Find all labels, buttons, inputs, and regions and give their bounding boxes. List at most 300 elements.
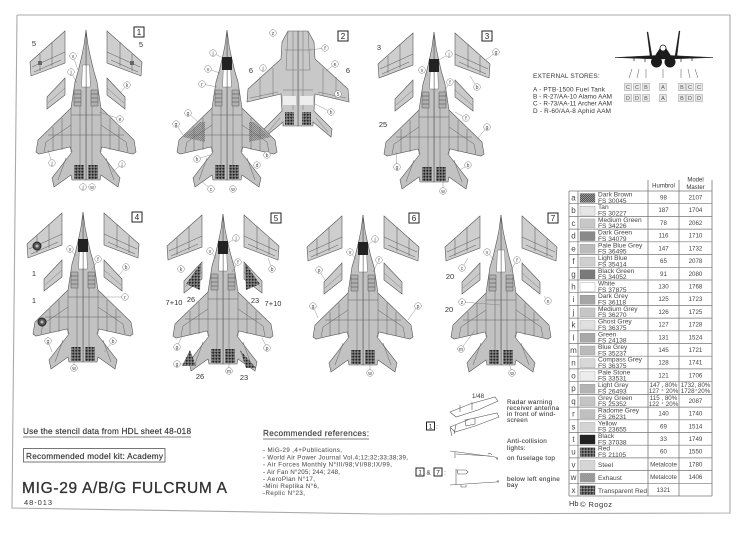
row q: Grey Green [598,395,633,402]
row h: White [598,280,615,288]
table header: Humbrol [652,184,675,190]
row b: 1704 [689,207,703,214]
callouts: view 3: v [421,68,424,74]
callouts: view 7: c [461,266,464,272]
badge: view 1 detail [426,422,438,430]
row x [572,486,671,495]
row x: 1321 [657,487,671,494]
row b: 187 [658,207,669,214]
row v: Steel [598,462,614,469]
row j: 126 [658,309,669,316]
callouts: view 1: j [50,161,53,167]
external stores heading: EXTERNAL STORES: [533,73,600,80]
callouts: view 7: z [461,300,464,306]
callouts: view 2: h [196,157,199,163]
row q: 122 ⁺ 20% [649,401,679,408]
badge: view 1 and 7 detail: : [444,470,446,476]
callouts: view 6 [310,236,421,377]
callouts: view 3: b [467,163,470,169]
note: engine bay: below left engine [507,476,560,483]
row j: Medium Grey [598,306,638,313]
row q: FS 25352 [598,401,627,408]
callouts: view 5: j [234,236,237,242]
callouts: view 5: m [227,369,231,375]
stores loadout boxes: C [697,85,701,91]
note: radar: screen [507,417,528,424]
row u: Red [598,446,610,453]
callouts: view 6: j [373,237,376,243]
callouts: view 6: g [312,304,315,310]
callouts: view 5: f [237,260,239,266]
row r: r [572,410,575,419]
references list: -Replic N°23, [263,490,305,497]
badge 2: 2 [341,32,346,41]
callouts: view 7 [458,249,551,377]
row e: Pale Blue Grey [598,242,643,249]
callouts: view 4: w [72,366,76,372]
title: MIG-29 A/B/G FULCRUM A [22,480,228,497]
row e [571,242,703,256]
row t: Black [598,433,615,440]
external stores list [533,86,612,115]
row a: a [571,194,576,202]
row g: 2080 [689,271,703,278]
callouts: view 1: j [69,70,72,76]
row n: n [571,359,576,368]
recommended kit box [24,448,165,462]
aircraft view 7: 20 [445,305,453,314]
callouts: view 7: v [486,250,489,256]
row l: 131 [658,334,669,341]
callouts: view 2: c [210,187,213,193]
external stores list: A - PTB-1500 Fuel Tank [533,86,606,94]
references list: -Mini Replika N°6, [263,483,319,490]
callouts: view 6: p [318,268,321,274]
callouts: view 5: g [176,345,179,351]
row n: 128 [658,360,669,367]
row c: 2062 [689,220,703,227]
row s: s [572,422,576,431]
row w: Metalcote [650,474,677,481]
row p: p [571,384,576,393]
callouts: view 7: w [510,371,514,377]
scale label: 1/48 [472,393,485,400]
row p: 147 , 80% [650,382,678,389]
row g: Black Green [598,268,635,275]
row w: Exhaust [598,475,622,482]
row d: Dark Green [598,230,632,237]
row o: o [571,371,576,380]
aircraft view 6 [307,213,421,377]
callouts: view 2: j [211,51,214,57]
row m: FS 35237 [598,350,627,357]
stencil note: Use the stencil data from HDL sheet 48-018 [23,427,191,436]
row m [570,344,703,357]
row p: FS 26493 [598,389,627,396]
row j [572,306,703,319]
callouts: view 2: b [266,153,269,159]
callouts: view 5: b [271,267,274,273]
callouts: view 2: f [324,46,326,52]
row e: 147 [658,245,669,252]
row f: f [572,257,575,266]
references list [263,447,408,497]
references list: - MiG-29 ,4+Publications, [263,447,342,454]
row d: 1710 [689,233,703,240]
callouts: view 6: w [368,371,372,377]
callouts: view 1: v [72,54,75,60]
row h: 130 [658,284,669,290]
badge 1 [134,27,144,37]
stores loadout boxes: D [688,96,692,102]
callouts: view 3: g [396,165,399,171]
callouts: view 1: e [119,117,122,123]
callouts: view 6: p [417,304,420,310]
row c: 78 [660,220,667,227]
row m: Blue Grey [598,344,628,351]
badge: view 1 and 7 detail: 7 [436,470,440,476]
row s: FS 23655 [598,427,627,434]
callouts: view 2: w [231,187,235,193]
row o: Pale Stone [598,369,631,376]
detail diagram: engine bay light [450,469,499,487]
row m: 145 [658,347,669,354]
row f: 2078 [689,258,703,265]
row g [571,268,703,281]
badge 5 [271,213,281,223]
row m: 1721 [689,347,703,354]
row u: 60 [660,449,667,456]
references list: - World Air Power Journal Vol.4;12;32;33;38;39, [263,454,408,462]
callouts: view 6: f [378,258,380,264]
callouts: view 3: w [441,189,445,195]
row f [572,255,703,268]
references list: - AeroPlan N°17, [263,476,315,483]
callouts: view 7: n [547,299,550,305]
row q: q [571,397,576,406]
badge 2 [338,31,348,41]
copyright note: Hb [569,499,579,508]
row w: 1406 [689,474,703,481]
badge 5: 5 [274,214,279,223]
row d: FS 34079 [598,236,627,243]
row c: Medium Green [598,217,642,224]
row t: 1749 [689,436,703,443]
row a: 98 [660,194,667,202]
aircraft view 2: 6 [249,66,253,75]
row p [571,382,711,396]
recommended references heading: Recommended references: [263,429,369,438]
callouts: view 7: m [459,347,463,353]
aircraft view 5: 26 [187,295,195,304]
note: anti-collision [507,438,555,462]
detail diagram: radar antenna [450,397,499,436]
row n: FS 36375 [598,363,627,370]
stores loadout boxes: B [680,96,684,102]
stores loadout boxes: C [635,85,639,91]
row o [571,369,703,383]
badge: view 1 and 7 detail [416,468,446,476]
aircraft view 2 [173,30,350,193]
row o: 1706 [689,372,703,379]
callouts: view 2: v [207,67,210,73]
aircraft view 5: 7+10 [265,299,281,308]
row r: Radome Grey [598,408,640,415]
aircraft view 1: 5 [139,40,143,49]
aircraft view 4: 1 [32,269,36,278]
badge 3 [482,31,492,41]
stores loadout boxes: D [697,96,701,102]
row r: 140 [658,411,669,418]
copyright note: © Rogoz [580,500,612,509]
aircraft view 5 [166,213,281,382]
badge 4 [132,212,142,222]
aircraft view 3: 25 [379,120,387,129]
callouts: view 2: g [187,111,190,117]
row t [572,433,703,446]
row h [571,280,703,294]
row n [571,357,703,370]
stores loadout boxes: A [661,96,665,102]
callouts: view 4: r [124,295,126,301]
row p: 127 ⁺ 20% [649,388,679,395]
row b: b [571,206,576,215]
callouts: view 2: z [272,31,275,37]
badge: view 1 detail: 1 [429,424,433,430]
aircraft view 7 [445,213,558,377]
callouts: view 4: b [112,339,115,345]
row g: FS 34052 [598,274,627,281]
row q: 2087 [689,398,703,405]
aircraft view 1: 5 [32,39,36,48]
references list: - Air Fan N°205; 244; 248, [263,469,340,476]
pylon ticks [629,69,698,78]
row j: FS 36270 [598,312,627,319]
aircraft view 5: 23 [240,373,248,382]
row x: Transparent Red [598,488,647,495]
row r: 1740 [689,411,703,418]
badge 6 [409,213,419,223]
callouts: view 4: g [47,339,50,345]
note: anti-collision: lights: [507,445,526,452]
stores loadout boxes: B [644,85,648,91]
row a: 2107 [689,194,703,202]
row a: FS 30045 [598,198,627,205]
external stores list: C - R-73/AA-11 Archer AAM [533,100,612,108]
row e: e [571,244,576,253]
row i: Dark Grey [598,293,629,300]
aircraft view 1 [30,27,144,191]
row v: Metalcote [650,461,677,468]
row g: 91 [660,271,667,278]
badge 3: 3 [485,32,490,41]
row s: 69 [660,423,667,430]
aircraft view 7: 20 [446,272,454,281]
row s: 1514 [689,423,703,430]
callouts: view 1: j [81,185,84,191]
row r: FS 26231 [598,414,627,421]
callouts: view 2: g [175,122,178,128]
callouts: view 6: v [349,250,352,256]
row l [573,331,703,345]
recommended kit box: Recommended model kit: Academy [26,452,164,461]
row s: Yellow [598,420,617,427]
row t: FS 37038 [598,439,627,446]
row k: Ghost Grey [598,319,632,326]
callouts: view 5: v [209,249,212,255]
stores loadout boxes: C [688,85,692,91]
badge 7 [548,213,558,223]
row l: 1524 [689,334,703,341]
stores loadout boxes: C [626,85,630,91]
row p: Light Grey [598,382,629,389]
aircraft view 5: 7+10 [166,298,182,307]
row e: FS 36495 [598,249,627,256]
callouts: view 3: g [486,125,489,131]
aircraft view 3 [377,31,499,195]
row d: 116 [659,233,669,240]
row j: j [572,308,575,317]
row u: FS 21105 [598,452,626,459]
row f: Light Blue [598,255,628,262]
row h: h [571,282,576,292]
callouts: view 5: p [266,346,269,352]
row o: 121 [658,372,669,379]
row p: 1728⁺20% [681,388,711,395]
front view aircraft silhouette [615,31,713,67]
row l: FS 24138 [598,338,627,345]
row v: v [572,460,576,469]
row i: 1723 [689,296,703,303]
note: radar: Radar warning [507,399,553,406]
stores loadout boxes [624,84,702,102]
row m: m [570,346,577,355]
table header [652,178,705,191]
note: engine bay: bay [507,482,519,489]
callouts: view 2: r [201,82,203,88]
row f: FS 35414 [598,261,627,268]
row h: FS 37875 [598,287,627,294]
row b [571,204,703,218]
row h: 1768 [689,284,703,290]
row q: 115 , 80% [650,395,678,402]
note: anti-collision: Anti-collision [507,438,547,445]
aircraft view 2: 6 [346,66,350,75]
badge 1: 1 [137,28,142,37]
callouts: view 1: w [90,185,94,191]
badge 4: 4 [135,213,140,222]
detail diagram: fuselage top light [450,451,498,460]
note: engine bay [507,476,560,489]
row p: 1732, 80% [681,382,711,389]
callouts: view 2 [173,30,341,193]
callouts: view 2: j [261,66,264,72]
sheet number: 48-013 [24,498,52,507]
badge 7: 7 [551,214,556,223]
row l: l [573,333,575,342]
badge 6: 6 [412,214,417,223]
callouts: view 4: v [69,247,72,253]
row g: g [571,270,576,279]
row e: 1732 [689,245,703,252]
copyright note [569,499,612,509]
row i: 125 [658,296,669,303]
row k: k [572,321,576,330]
row a: Dark Brown [598,192,633,198]
references list: - Air Forces Monthly N°III/98;VI/98;IX/99, [263,462,392,468]
callouts: view 5: g [176,362,179,368]
aircraft view 5: 23 [251,296,259,305]
row i: FS 36118 [598,300,626,307]
row c: FS 34226 [598,223,627,230]
row q [571,395,703,408]
row j: 1725 [689,309,703,316]
table header: Model [687,178,704,184]
callouts: view 3: g [495,50,498,56]
row c: c [572,219,576,228]
row i [573,293,703,306]
row k [572,319,703,332]
row t: 33 [660,436,667,443]
row o: FS 33531 [598,376,627,383]
badge: view 1 and 7 detail: & [426,470,431,476]
row v: 1780 [689,461,703,468]
callouts: view 2: h [330,110,333,116]
external stores list: D - R-60/AA-8 Aphid AAM [533,108,611,115]
callouts: view 3: b [476,85,479,91]
callouts: view 3 [394,49,499,195]
row n: Compass Grey [598,357,643,364]
row b: FS 30227 [598,210,627,217]
note: anti-collision: on fuselage top [507,455,555,462]
row k: FS 36375 [598,325,627,332]
row x: x [572,486,576,495]
aircraft view 3: 3 [377,43,381,52]
callouts: view 3: f [449,80,451,86]
aircraft view 4: 1 [32,296,36,305]
callouts: view 1 [48,53,130,191]
table header: Master [686,185,705,191]
stores loadout boxes: A [661,85,665,91]
row u [571,446,703,459]
row w: w [570,473,577,482]
stores loadout boxes: B [680,85,684,91]
callouts: view 1: j [120,162,123,168]
note: radar: receiver antenna [507,405,560,412]
row n: 1741 [689,360,703,367]
stores loadout boxes: D [626,96,630,102]
stores loadout boxes: D [635,96,639,102]
callouts: view 3: f [465,116,467,122]
row d: d [571,232,576,241]
row k: 1728 [689,322,703,329]
row k: 127 [658,322,669,329]
row l: Green [598,331,617,338]
row u: u [571,448,576,457]
row a [571,192,703,205]
row v [572,460,703,469]
note: radar: in front of wind- [507,411,556,418]
callouts: view 5 [174,235,275,375]
callouts: view 4: b [125,265,128,271]
callouts: view 3: j [447,52,450,58]
aircraft view 4 [27,212,142,372]
callouts: view 4 [45,246,129,372]
row r [572,408,703,421]
row w [570,473,703,482]
callouts: view 2: d [256,163,259,169]
callouts: view 4: f [97,257,99,263]
